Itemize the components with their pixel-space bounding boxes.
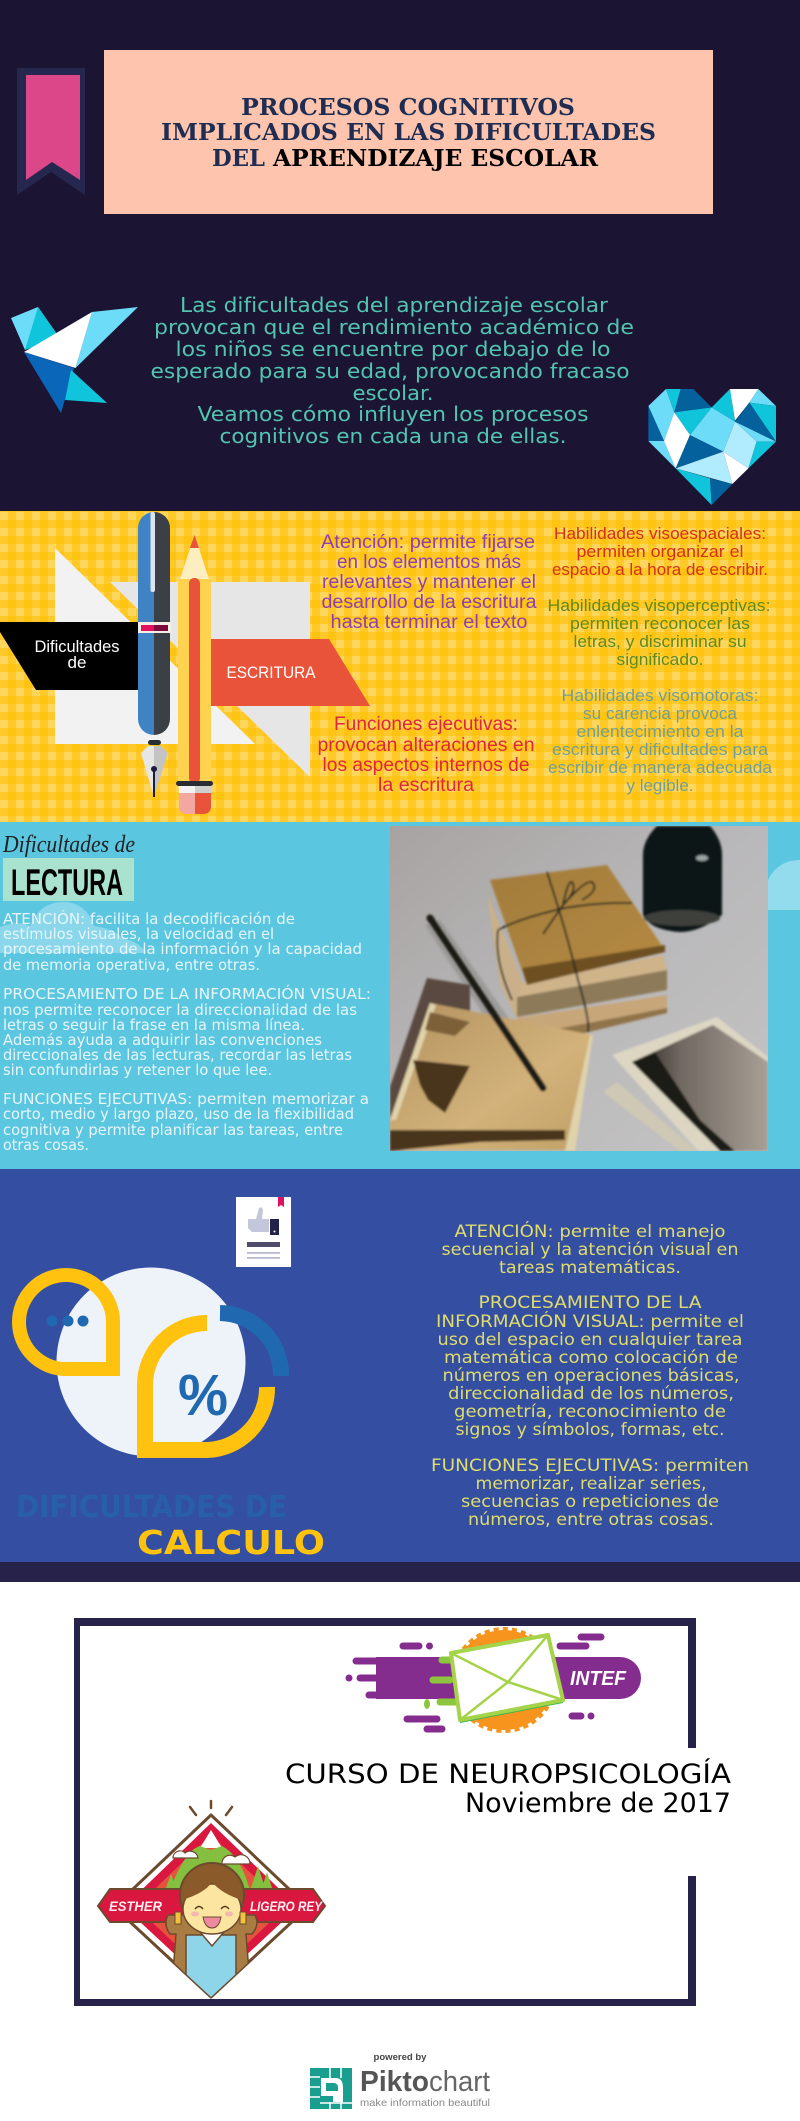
text: calculo body: direccionalidad de los números,: [448, 1384, 734, 1404]
cloud left: [0, 902, 146, 953]
text: habilidades visomotoras: Habilidades visomotoras:: [562, 686, 758, 705]
text: habilidades visoespaciales: Habilidades visoespaciales:: [554, 524, 766, 543]
text: lectura body: otras cosas.: [3, 1136, 89, 1154]
dark divider band: [0, 1562, 800, 1582]
icon: pencil: [176, 535, 213, 814]
text: lectura body: [3, 909, 371, 1154]
panel: header background: [0, 0, 800, 511]
black ribbon: dificultades de: de: [68, 653, 86, 672]
photo: old books, pen and postcards: [390, 826, 768, 1151]
text: calculo body: tareas matemáticas.: [499, 1258, 681, 1278]
badge name: [109, 1898, 323, 1914]
brand: Piktochart wordmark: Pikto: [360, 2066, 429, 2098]
text: habilidades visoperceptivas: letras, y discriminar su: [574, 632, 746, 651]
panel: escritura: [0, 511, 800, 822]
speech bubble with percent: %: [178, 1363, 228, 1428]
icon: Esther badge: [98, 1801, 325, 2001]
intro text: cognitivos en cada una de ellas.: [220, 424, 566, 448]
text: calculo body: secuencias o repeticiones de: [461, 1492, 719, 1512]
text: lectura body: FUNCIONES EJECUTIVAS: permiten memorizar a: [3, 1090, 369, 1108]
panel: footer frame: [74, 1618, 696, 2006]
heading: dificultades de: Dificultades de: [2, 832, 135, 858]
intro text: los niños se encuentre por debajo de lo: [176, 337, 610, 361]
credit: powered by: powered by: [374, 2052, 427, 2063]
text: habilidades visoperceptivas: significado.: [616, 650, 704, 669]
text: calculo body: números, entre otras cosas.: [468, 1510, 714, 1530]
text: lectura body: ATENCIÓN: facilita la decodificación de: [3, 909, 295, 928]
icon: INTEF logo: [346, 1630, 641, 1730]
text: atencion: desarrollo de la escritura: [322, 592, 537, 613]
text: lectura body: sin confundirlas y retener lo que lee.: [3, 1061, 272, 1079]
text: atencion: [321, 532, 537, 633]
brand: Piktochart wordmark: make information beautiful: [360, 2097, 490, 2109]
black ribbon: dificultades de: Dificultades: [34, 637, 120, 656]
panel: lectura: [0, 822, 800, 1169]
text: lectura body: procesamiento de la información y la capacidad: [3, 940, 362, 958]
text: course title: CURSO DE NEUROPSICOLOGÍA: [285, 1758, 732, 1790]
text: funciones ejecutivas: Funciones ejecutivas:: [334, 714, 518, 735]
text: habilidades visomotoras: su carencia provoca: [583, 704, 738, 723]
red ribbon: escritura: ESCRITURA: [226, 663, 316, 682]
badge name: LIGERO REY: [250, 1898, 323, 1914]
text: atencion: hasta terminar el texto: [330, 612, 528, 633]
placeholder text: T1: Double click to edit: [329, 332, 470, 346]
title banner: [104, 50, 713, 214]
text: lectura body: PROCESAMIENTO DE LA INFORMACIÓN VISUAL:: [3, 984, 371, 1003]
text: funciones ejecutivas: [318, 714, 534, 796]
title text: IMPLICADOS EN LAS DIFICULTADES: [161, 119, 656, 146]
text: calculo body: matemática como colocación de: [444, 1348, 738, 1368]
text: habilidades visomotoras: escribir de manera adecuada: [548, 758, 773, 777]
icon: document with thumbs up: [236, 1197, 291, 1267]
black ribbon: dificultades de: [0, 622, 140, 690]
intro text: Las dificultades del aprendizaje escolar: [180, 293, 609, 317]
icon: bookmark: [17, 68, 85, 195]
text: lectura body: direccionales de las lecturas, recordar las letras: [3, 1046, 352, 1064]
text: habilidades visoperceptivas: [548, 596, 770, 669]
icon: Piktochart logo: [310, 2068, 352, 2109]
speech bubble with dots: [19, 1275, 113, 1369]
icon: origami bird: [11, 307, 138, 413]
text: habilidades visoperceptivas: permiten reconocer las: [570, 614, 750, 633]
text: atencion: en los elementos más: [337, 552, 521, 573]
text: calculo body: INFORMACIÓN VISUAL: permite el: [436, 1310, 744, 1332]
title text: [161, 94, 656, 172]
text: lectura body: letras o seguir la frase en la misma línea.: [3, 1016, 305, 1034]
text: habilidades visoespaciales: [552, 524, 768, 579]
text: course title: Noviembre de 2017: [465, 1788, 731, 1819]
intro text: esperado para su edad, provocando fracaso: [150, 359, 630, 383]
text: lectura body: nos permite reconocer la direccionalidad de las: [3, 1001, 357, 1019]
text: calculo body: signos y símbolos, formas, etc.: [456, 1420, 724, 1440]
badge ribbon: [98, 1889, 325, 1922]
text: funciones ejecutivas: la escritura: [378, 775, 474, 796]
heading: dificultades de: DIFICULTADES DE: [16, 1490, 287, 1525]
badge girl: [166, 1863, 257, 2001]
text: habilidades visomotoras: [548, 686, 773, 795]
intro text: provocan que el rendimiento académico de: [154, 315, 634, 339]
icon: INTEF logo: INTEF: [570, 1668, 627, 1690]
text: course title: [285, 1758, 732, 1819]
title text: APRENDIZAJE ESCOLAR: [272, 145, 599, 172]
cloud right: [768, 860, 800, 910]
heading: lectura: LECTURA: [11, 862, 123, 903]
badge name: ESTHER: [109, 1898, 163, 1914]
text: calculo body: PROCESAMIENTO DE LA: [478, 1293, 702, 1313]
text: lectura body: cognitiva y permite planificar las tareas, entre: [3, 1121, 343, 1139]
text: calculo body: ATENCIÓN: permite el manejo: [454, 1220, 726, 1242]
title text: DEL: [212, 145, 265, 172]
text: calculo body: secuencial y la atención visual en: [442, 1240, 738, 1260]
text: funciones ejecutivas: provocan alteraciones en: [318, 735, 534, 756]
speech bubble with percent: [145, 1313, 281, 1450]
text: calculo body: geometría, reconocimiento de: [454, 1402, 726, 1422]
text: lectura body: estímulos visuales, la velocidad en el: [3, 925, 274, 943]
heading: lectura: [3, 858, 134, 903]
text: calculo body: FUNCIONES EJECUTIVAS: permiten: [431, 1456, 749, 1476]
text: atencion: Atención: permite fijarse: [321, 532, 535, 553]
text: calculo body: uso del espacio en cualquier tarea: [438, 1330, 742, 1350]
text: habilidades visoespaciales: permiten organizar el: [576, 542, 744, 561]
text: habilidades visomotoras: escritura y dificultades para: [552, 740, 769, 759]
background triangles: [55, 548, 310, 777]
text: lectura body: corto, medio y largo plazo, uso de la flexibilidad: [3, 1105, 354, 1123]
brand: Piktochart wordmark: chart: [429, 2066, 490, 2098]
red ribbon: escritura: [211, 639, 370, 706]
text: funciones ejecutivas: los aspectos internos de: [322, 755, 530, 776]
chart illustration: circle with speech bubbles: [19, 1268, 281, 1456]
intro text: escolar.: [352, 381, 434, 405]
text: calculo body: memorizar, realizar series,: [476, 1474, 706, 1494]
text: calculo body: números en operaciones básicas,: [442, 1366, 740, 1386]
text: habilidades visomotoras: enlentecimiento en la: [576, 722, 744, 741]
brand: Piktochart wordmark: [360, 2066, 490, 2109]
icon: polygon heart: [648, 389, 776, 505]
intro text: [150, 293, 634, 448]
intro text: Veamos cómo influyen los procesos: [198, 402, 588, 426]
heading: calculo: CALCULO: [137, 1523, 325, 1562]
panel: calculo: [0, 1169, 800, 1562]
text: habilidades visoespaciales: espacio a la hora de escribir.: [552, 560, 768, 579]
text: habilidades visoperceptivas: Habilidades visoperceptivas:: [548, 596, 770, 615]
text: lectura body: de memoria operativa, entre otras.: [3, 956, 260, 974]
text: calculo body: [431, 1220, 749, 1530]
text: atencion: relevantes y mantener el: [322, 572, 536, 593]
title text: PROCESOS COGNITIVOS: [241, 94, 575, 121]
text: habilidades visomotoras: y legible.: [626, 776, 694, 795]
text: lectura body: Además ayuda a adquirir las convenciones: [3, 1031, 322, 1049]
icon: fountain pen: [138, 512, 171, 797]
